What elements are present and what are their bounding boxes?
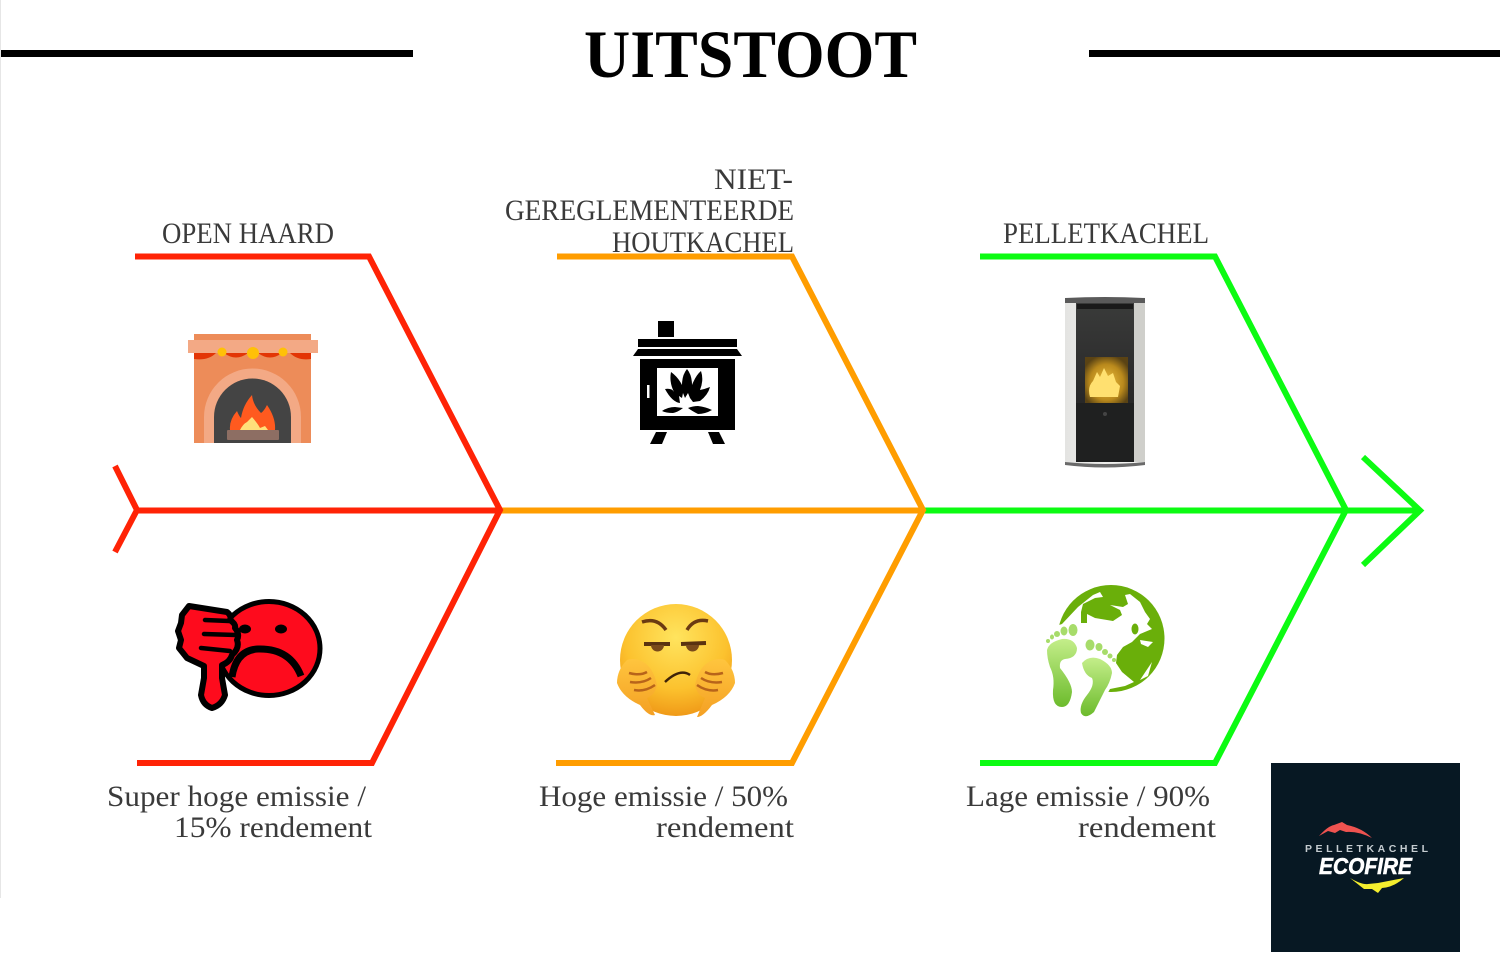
heading: open haard: OPEN HAARD (162, 217, 334, 250)
caption: open haard: Super hoge emissie / (107, 780, 367, 813)
heading: niet-gereglementeerde houtkachel: NIET- (714, 163, 793, 196)
heading: niet-gereglementeerde houtkachel: GEREGLEMENTEERDE (505, 194, 794, 227)
caption: houtkachel: rendement (656, 811, 795, 844)
logo: pelletkachel ecofire: ECOFIRE (1319, 853, 1413, 879)
icon: earth with green footprints (1046, 585, 1164, 716)
heading: niet-gereglementeerde houtkachel: HOUTKACHEL (612, 226, 794, 259)
fishbone diagram: orange section (500, 256, 923, 763)
fishbone diagram: green section (923, 256, 1420, 763)
icon: thumb down with sad face (178, 602, 320, 708)
caption: open haard (107, 780, 373, 844)
caption: houtkachel (539, 780, 795, 844)
caption: open haard: 15% rendement (174, 811, 373, 844)
caption: houtkachel: Hoge emissie / 50% (539, 780, 788, 813)
logo: pelletkachel ecofire: PELLETKACHEL (1305, 843, 1429, 855)
caption: pelletkachel: Lage emissie / 90% (966, 780, 1210, 813)
icon: open fireplace (188, 334, 318, 443)
caption: pelletkachel: rendement (1078, 811, 1217, 844)
heading: pelletkachel: PELLETKACHEL (1003, 217, 1209, 250)
icon: frowning emoji with thumbs down (617, 604, 735, 717)
caption: pelletkachel (966, 780, 1217, 844)
title (1, 16, 1500, 92)
icon: pellet stove (1065, 297, 1145, 468)
title: UITSTOOT (584, 16, 917, 92)
logo: pelletkachel ecofire (1271, 763, 1460, 952)
heading: niet-gereglementeerde houtkachel (505, 163, 794, 259)
fishbone diagram: red section (115, 256, 500, 763)
icon: wood stove (633, 321, 742, 444)
